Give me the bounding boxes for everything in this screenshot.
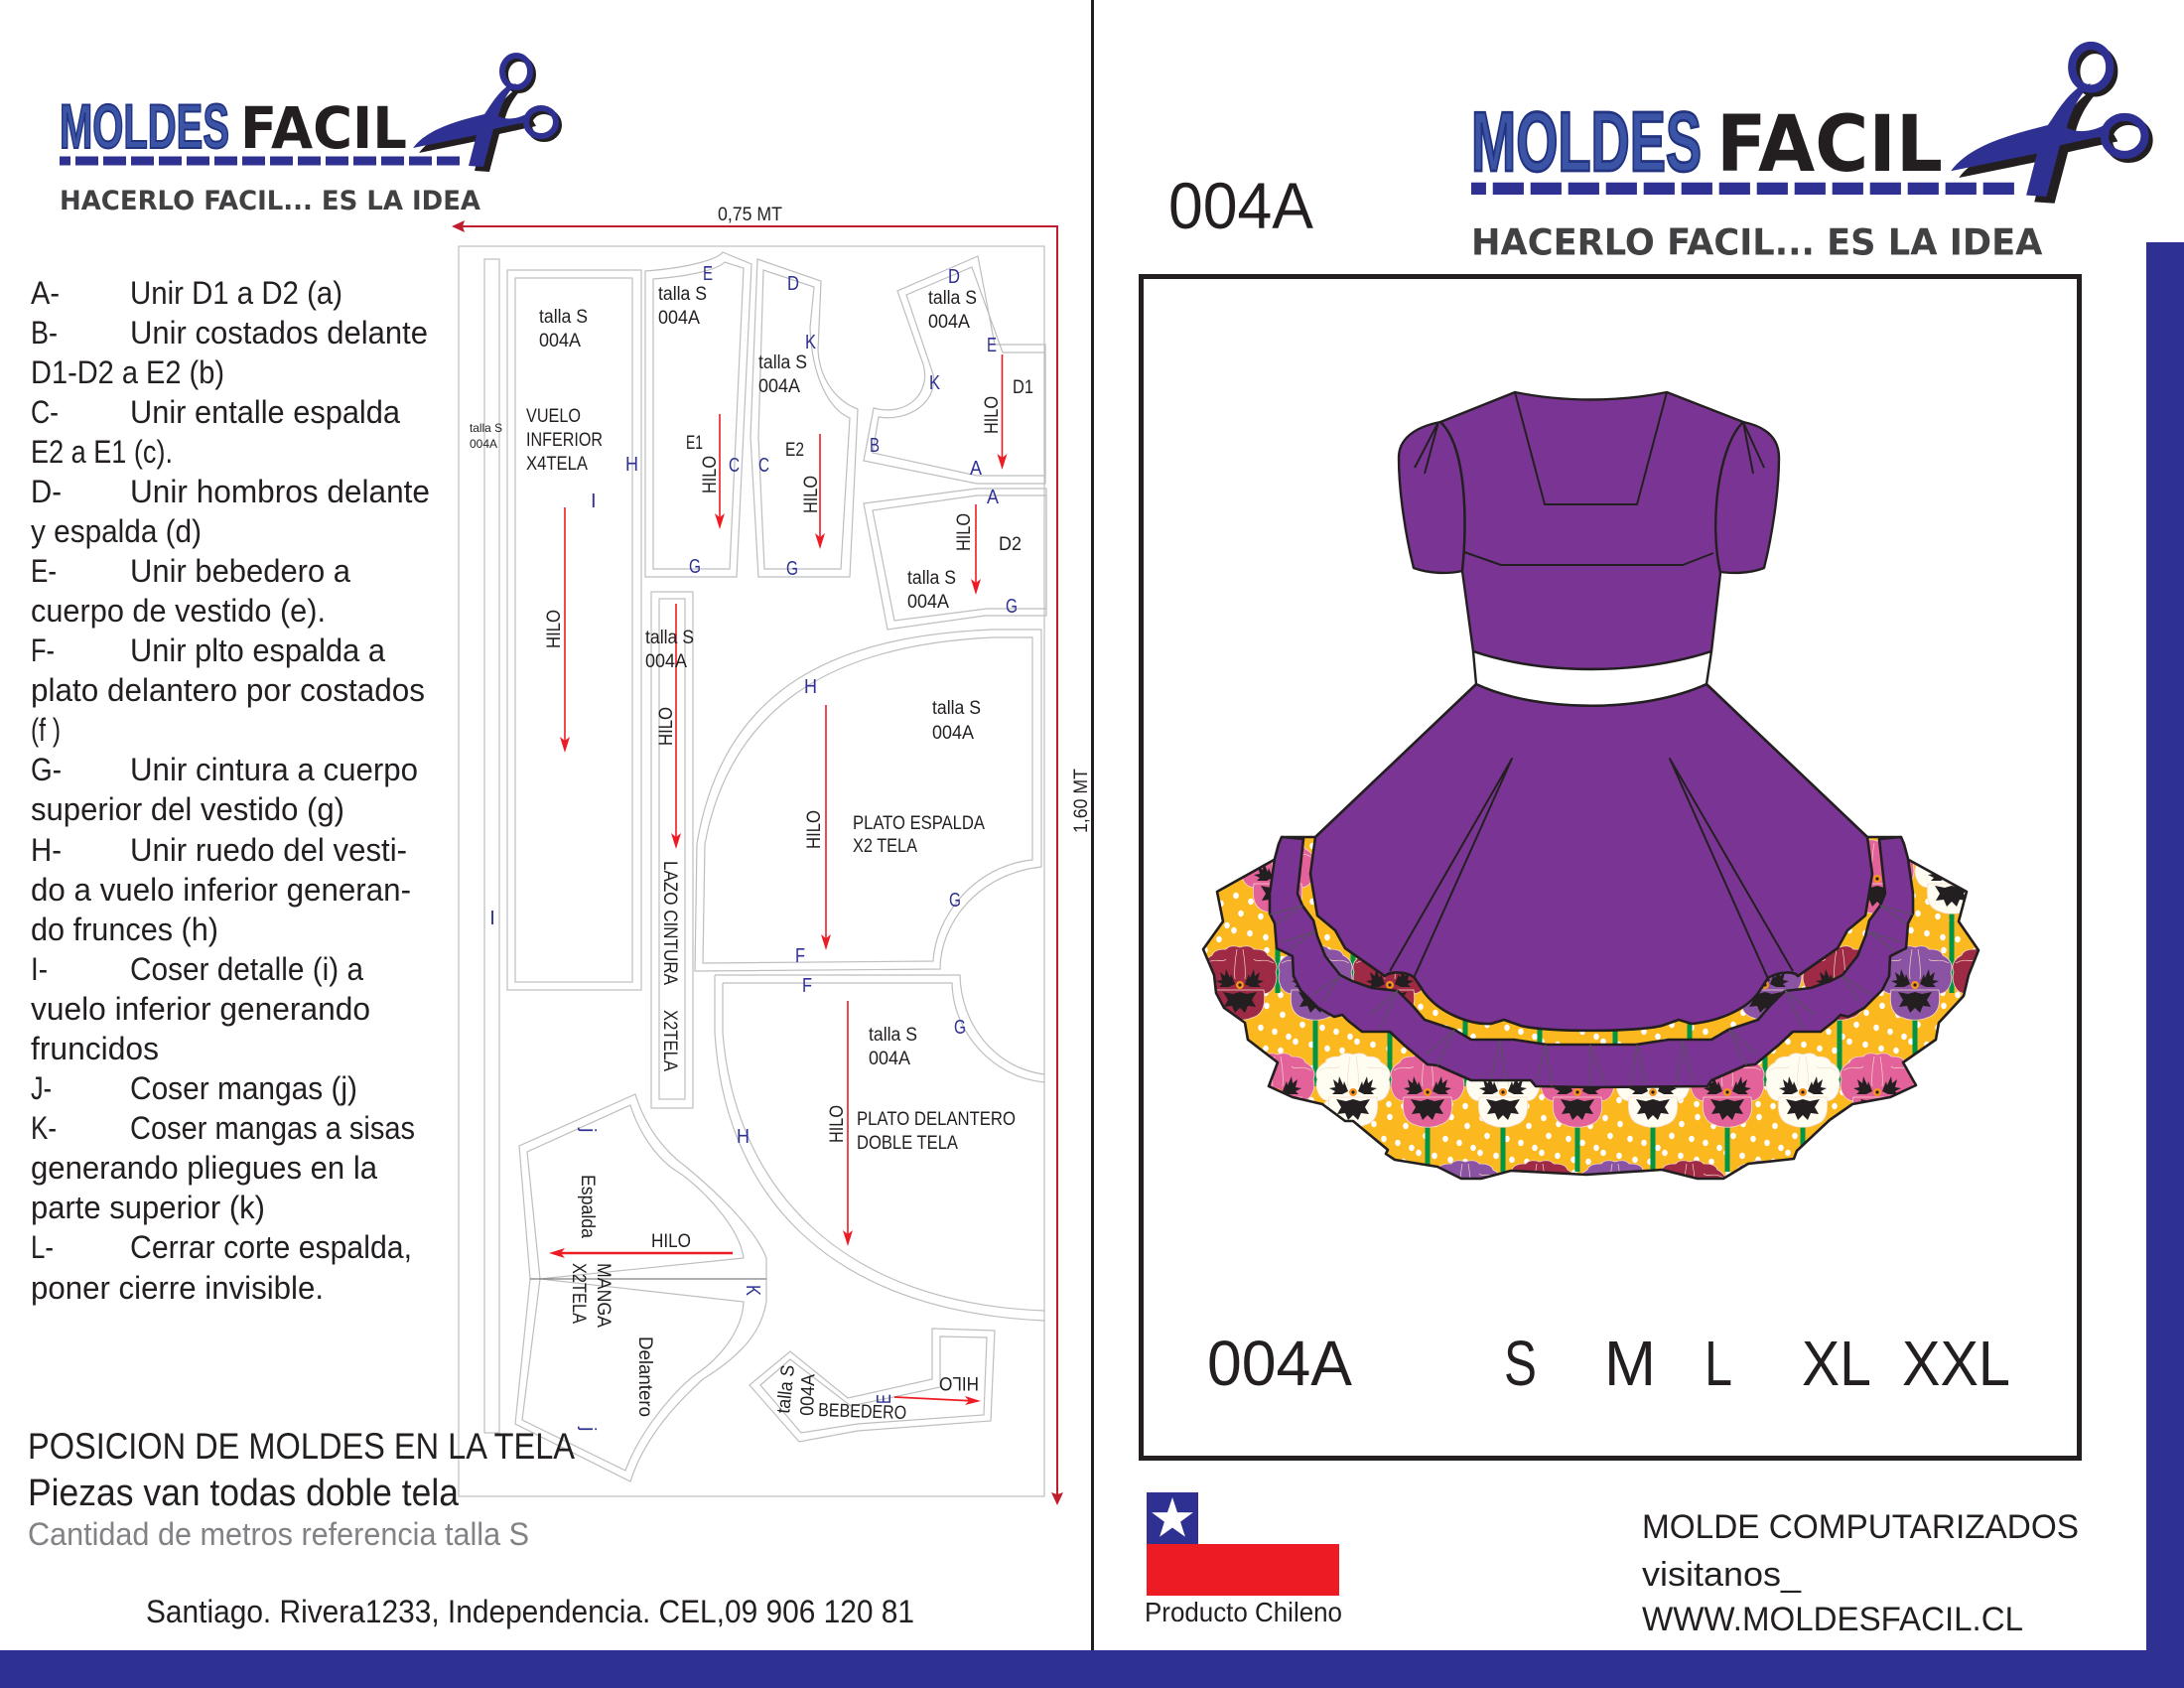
piece: vuelo inferior: HILO xyxy=(544,610,565,648)
piece: manga xyxy=(515,1094,766,1481)
instructions list: do frunces (h) xyxy=(31,912,218,947)
piece: manga: j xyxy=(577,1426,599,1431)
piece: plato delantero: HILO xyxy=(827,1105,848,1143)
instructions list: F- xyxy=(31,633,55,668)
piece: plato delantero: 004A xyxy=(869,1049,910,1069)
skirt xyxy=(1310,684,1872,1031)
piece: D2: HILO xyxy=(954,513,975,551)
size row: 004A xyxy=(1207,1328,1352,1399)
instructions list: (f ) xyxy=(31,712,61,748)
piece: vuelo inferior: X4TELA xyxy=(526,454,588,475)
instructions list: B- xyxy=(31,315,58,351)
right sleeve xyxy=(1712,422,1779,573)
instructions list: A- xyxy=(31,275,60,311)
piece: E1: HILO xyxy=(700,456,721,493)
piece: bebedero: talla S xyxy=(773,1364,799,1415)
piece: vuelo inferior: H xyxy=(625,454,638,476)
left sleeve xyxy=(1399,422,1465,573)
piece: plato espalda: 004A xyxy=(932,723,974,744)
website callout: WWW.MOLDESFACIL.CL xyxy=(1642,1601,2023,1638)
instructions list: superior del vestido (g) xyxy=(31,791,344,827)
instructions list: do a vuelo inferior generan- xyxy=(31,872,411,908)
piece: manga: Espalda xyxy=(577,1175,598,1238)
instructions list: fruncidos xyxy=(31,1031,159,1066)
piece: plato espalda: X2 TELA xyxy=(853,836,917,857)
dimension arrow: width and length: 1,60 MT xyxy=(1071,769,1092,833)
piece: plato espalda xyxy=(695,630,1041,971)
size row: XXL xyxy=(1902,1328,2010,1399)
piece: D2: talla S xyxy=(907,568,956,589)
piece: vuelo inferior xyxy=(507,270,641,990)
bottom blue band xyxy=(0,1650,2184,1688)
piece: D1: talla S xyxy=(928,288,977,309)
piece: vuelo inferior: I xyxy=(591,491,597,512)
instructions list: Coser detalle (i) a xyxy=(130,951,363,987)
piece: bebedero xyxy=(750,1329,995,1442)
instructions list: E- xyxy=(31,553,57,589)
instructions list: Unir costados delante xyxy=(130,315,428,351)
piece: lazo cintura: LAZO CINTURA xyxy=(659,861,680,985)
piece: bebedero: E xyxy=(874,1394,895,1404)
piece: plato espalda: G xyxy=(949,890,961,912)
piece: E1: 004A xyxy=(658,308,700,329)
logo: left: FACIL xyxy=(240,94,407,162)
model code: 004A xyxy=(1168,169,1313,242)
logo: left: HACERLO FACIL... ES LA IDEA xyxy=(60,186,480,216)
piece: E2: talla S xyxy=(758,352,807,373)
website callout xyxy=(1642,1508,2079,1638)
flag caption: Producto Chileno xyxy=(1145,1597,1342,1627)
piece: lazo cintura: talla S xyxy=(645,628,694,648)
piece: vuelo inferior: VUELO xyxy=(526,406,581,427)
piece: plato espalda: PLATO ESPALDA xyxy=(853,813,985,834)
piece: E1: E xyxy=(703,263,713,285)
instructions list: Unir D1 a D2 (a) xyxy=(130,275,342,311)
piece: D1: HILO xyxy=(982,396,1003,434)
collar and yoke seams xyxy=(1415,392,1764,565)
instructions list: Unir bebedero a xyxy=(130,553,350,589)
website callout: visitanos_ xyxy=(1642,1556,1802,1594)
instructions list: Coser mangas (j) xyxy=(130,1070,357,1106)
instructions list: vuelo inferior generando xyxy=(31,991,370,1027)
piece: D1: D1 xyxy=(1013,377,1033,398)
piece: vuelo inferior: 004A xyxy=(539,331,581,352)
piece: plato espalda: H xyxy=(804,676,817,698)
logo: right: MOLDES xyxy=(1471,95,1702,190)
instructions list: parte superior (k) xyxy=(31,1190,265,1225)
instructions list: plato delantero por costados xyxy=(31,672,425,708)
note: metros: Cantidad de metros referencia talla S xyxy=(28,1516,529,1552)
piece: narrow strip: 004A xyxy=(470,437,497,451)
piece: plato delantero: PLATO DELANTERO xyxy=(857,1109,1016,1130)
piece: lazo cintura: HILO xyxy=(656,707,677,746)
instructions list: y espalda (d) xyxy=(31,513,202,549)
fabric outline xyxy=(459,246,1044,1496)
piece: manga: K xyxy=(742,1285,763,1297)
piece: E2: G xyxy=(786,558,798,580)
pattern layout xyxy=(459,246,1046,1496)
size row: XL xyxy=(1802,1328,1871,1399)
piece: plato delantero: talla S xyxy=(869,1025,917,1046)
instructions list: Unir cintura a cuerpo xyxy=(130,752,418,787)
piece: E2: D xyxy=(787,273,799,295)
ruffle gathers xyxy=(1270,906,1913,1086)
size row: M xyxy=(1604,1328,1656,1399)
dress illustration xyxy=(1201,391,1979,1180)
instructions list: G- xyxy=(31,752,62,787)
instructions list: Unir hombros delante xyxy=(130,474,430,509)
piece: plato espalda: talla S xyxy=(932,698,981,719)
piece: vuelo inferior: talla S xyxy=(539,307,588,328)
instructions list: C- xyxy=(31,394,59,430)
piece: D1: A xyxy=(970,458,983,480)
piece: plato delantero xyxy=(715,975,1044,1321)
instructions list: Coser mangas a sisas xyxy=(130,1110,415,1146)
piece: D2: D2 xyxy=(999,534,1022,555)
instructions list: D1-D2 a E2 (b) xyxy=(31,354,224,390)
piece: D1: E xyxy=(987,335,997,356)
piece: D2: 004A xyxy=(907,592,949,613)
purple ruffle xyxy=(1270,837,1913,1087)
piece: D1: D xyxy=(948,266,960,288)
piece: bebedero: BEBEDERO xyxy=(818,1400,907,1424)
dimension arrow: width and length: 0,75 MT xyxy=(718,205,782,225)
product frame xyxy=(1142,276,2079,1458)
piece: lazo cintura: X2TELA xyxy=(659,1010,680,1071)
heading: posicion de moldes: POSICION DE MOLDES EN LA TELA xyxy=(28,1426,575,1467)
right blue band xyxy=(2146,242,2184,1688)
piece: manga: MANGA xyxy=(593,1263,614,1328)
piece: plato espalda: F xyxy=(795,945,805,967)
piece: manga: HILO xyxy=(651,1231,691,1252)
piece: plato espalda: HILO xyxy=(804,810,825,849)
piece: narrow strip: talla S xyxy=(470,421,502,435)
piece: E1: E1 xyxy=(686,433,703,454)
logo: right: FACIL xyxy=(1716,98,1943,190)
instructions list: E2 a E1 (c). xyxy=(31,434,173,470)
subheading: doble tela: Piezas van todas doble tela xyxy=(28,1473,460,1514)
piece: plato delantero: H xyxy=(737,1126,750,1148)
size row xyxy=(1207,1328,2010,1399)
piece: D1: B xyxy=(870,435,880,457)
instructions list: D- xyxy=(31,474,62,509)
waist belt xyxy=(1473,651,1711,706)
piece: E1: talla S xyxy=(658,284,707,305)
piece: vuelo inferior: INFERIOR xyxy=(526,430,603,451)
piece: narrow strip xyxy=(470,259,502,1433)
instructions list: I- xyxy=(31,951,48,987)
piece: D1: K xyxy=(929,372,941,394)
instructions list: H- xyxy=(31,832,62,868)
piece: plato delantero: F xyxy=(802,975,812,997)
website callout: MOLDE COMPUTARIZADOS xyxy=(1642,1508,2079,1546)
piece: manga: j xyxy=(577,1127,599,1132)
piece: narrow strip: I xyxy=(489,908,495,929)
size row: L xyxy=(1705,1328,1732,1399)
instructions list: Cerrar corte espalda, xyxy=(130,1229,412,1265)
piece: plato delantero: DOBLE TELA xyxy=(857,1133,958,1154)
piece: D1: 004A xyxy=(928,312,970,333)
logo: left xyxy=(60,56,559,216)
piece: lazo cintura: 004A xyxy=(645,651,687,672)
piece: bebedero: 004A xyxy=(797,1373,819,1416)
bodice xyxy=(1440,392,1743,669)
piece: manga: Delantero xyxy=(634,1336,655,1417)
piece: lazo cintura xyxy=(645,592,694,1108)
instructions list: Unir entalle espalda xyxy=(130,394,400,430)
size row: S xyxy=(1504,1328,1537,1399)
piece: E2: C xyxy=(758,455,769,477)
logo: left: MOLDES xyxy=(60,92,229,162)
instructions list: cuerpo de vestido (e). xyxy=(31,593,326,629)
instructions list: Unir plto espalda a xyxy=(130,633,385,668)
piece: E1 xyxy=(645,252,751,578)
instructions list xyxy=(31,275,430,1306)
instructions list: L- xyxy=(31,1229,54,1265)
piece: bebedero: HILO xyxy=(939,1372,979,1393)
instructions list: K- xyxy=(31,1110,57,1146)
instructions list: generando pliegues en la xyxy=(31,1150,377,1186)
fold divider xyxy=(1091,0,1094,1650)
piece: E2 xyxy=(751,259,858,580)
instructions list: J- xyxy=(31,1070,52,1106)
printed fabric underskirt xyxy=(1201,836,1979,1180)
piece: E2: K xyxy=(805,332,817,353)
piece: D2 xyxy=(864,487,1046,630)
logo: right: HACERLO FACIL... ES LA IDEA xyxy=(1471,220,2043,263)
piece: E2: HILO xyxy=(801,476,822,513)
instructions list: poner cierre invisible. xyxy=(31,1270,324,1306)
piece: manga: X2TELA xyxy=(568,1263,589,1324)
address: Santiago. Rivera1233, Independencia. CEL,09 906 120 81 xyxy=(146,1594,914,1629)
piece: D2: A xyxy=(987,487,1000,508)
piece: plato delantero: G xyxy=(954,1017,966,1039)
instructions list: Unir ruedo del vesti- xyxy=(130,832,407,868)
logo: right xyxy=(1471,46,2149,263)
piece: D2: G xyxy=(1006,596,1018,618)
dimension arrow: width and length xyxy=(452,205,1092,1505)
piece: E1: C xyxy=(729,455,740,477)
piece: E2: E2 xyxy=(785,440,804,461)
piece: D1 xyxy=(864,256,1045,484)
piece: E1: G xyxy=(689,556,701,578)
skirt pleats xyxy=(1390,759,1793,981)
icon: chilean flag xyxy=(1147,1492,1339,1596)
piece: E2: 004A xyxy=(758,376,800,397)
